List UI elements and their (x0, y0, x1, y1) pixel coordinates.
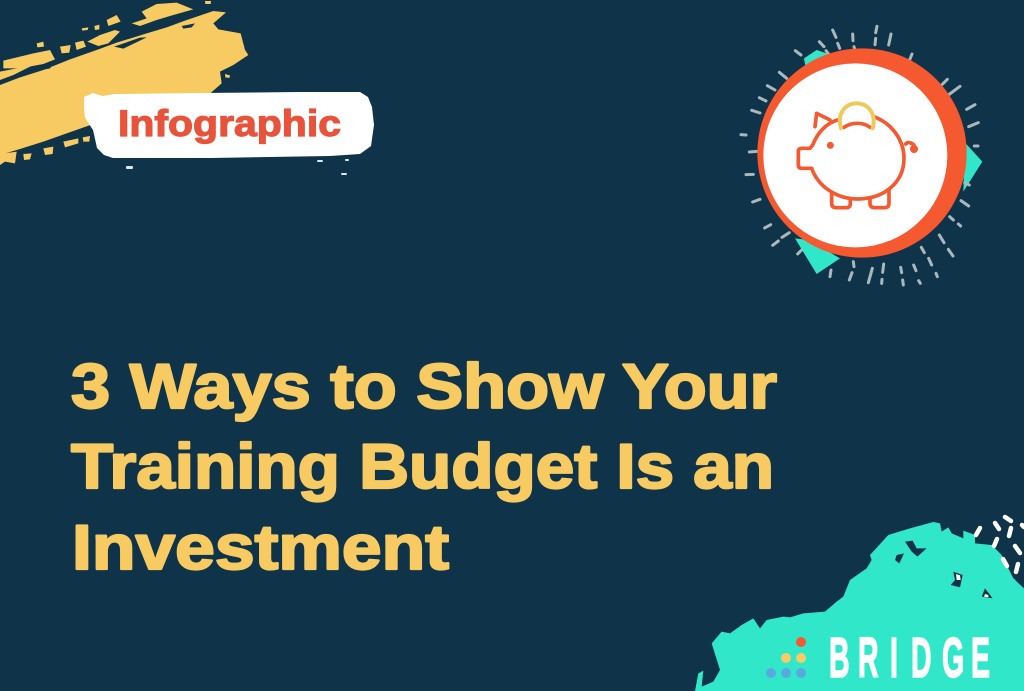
piggy bank icon (798, 103, 917, 208)
white disc (763, 63, 947, 247)
pig body (798, 117, 904, 199)
label: Infographic (84, 92, 374, 175)
orange ring (757, 48, 967, 258)
specks under label (126, 159, 349, 175)
logo wordmark: BRIDGE (829, 625, 990, 690)
teal brush (695, 522, 1024, 691)
label text: Infographic (118, 103, 341, 144)
white brush label (84, 92, 374, 158)
title (71, 352, 777, 583)
white grains (976, 517, 1024, 572)
pig legs (832, 193, 850, 208)
title line 2: Training Budget Is an (71, 432, 774, 502)
brush gaps (37, 23, 195, 71)
radiating dashes (741, 26, 978, 285)
pig ear (815, 113, 830, 127)
logo dots (766, 637, 806, 678)
teal shapes behind badge (795, 50, 982, 274)
yellow brush stroke (0, 1, 248, 165)
title line 1: 3 Ways to Show Your (71, 352, 777, 422)
brush gaps (895, 541, 1024, 598)
title line 3: Investment (72, 513, 449, 583)
badge: piggy bank (741, 26, 982, 285)
pig eye (829, 144, 832, 147)
pig tail (906, 143, 914, 145)
coin (840, 103, 874, 128)
corner: Bridge logo (695, 517, 1024, 691)
coin slot (844, 123, 870, 127)
